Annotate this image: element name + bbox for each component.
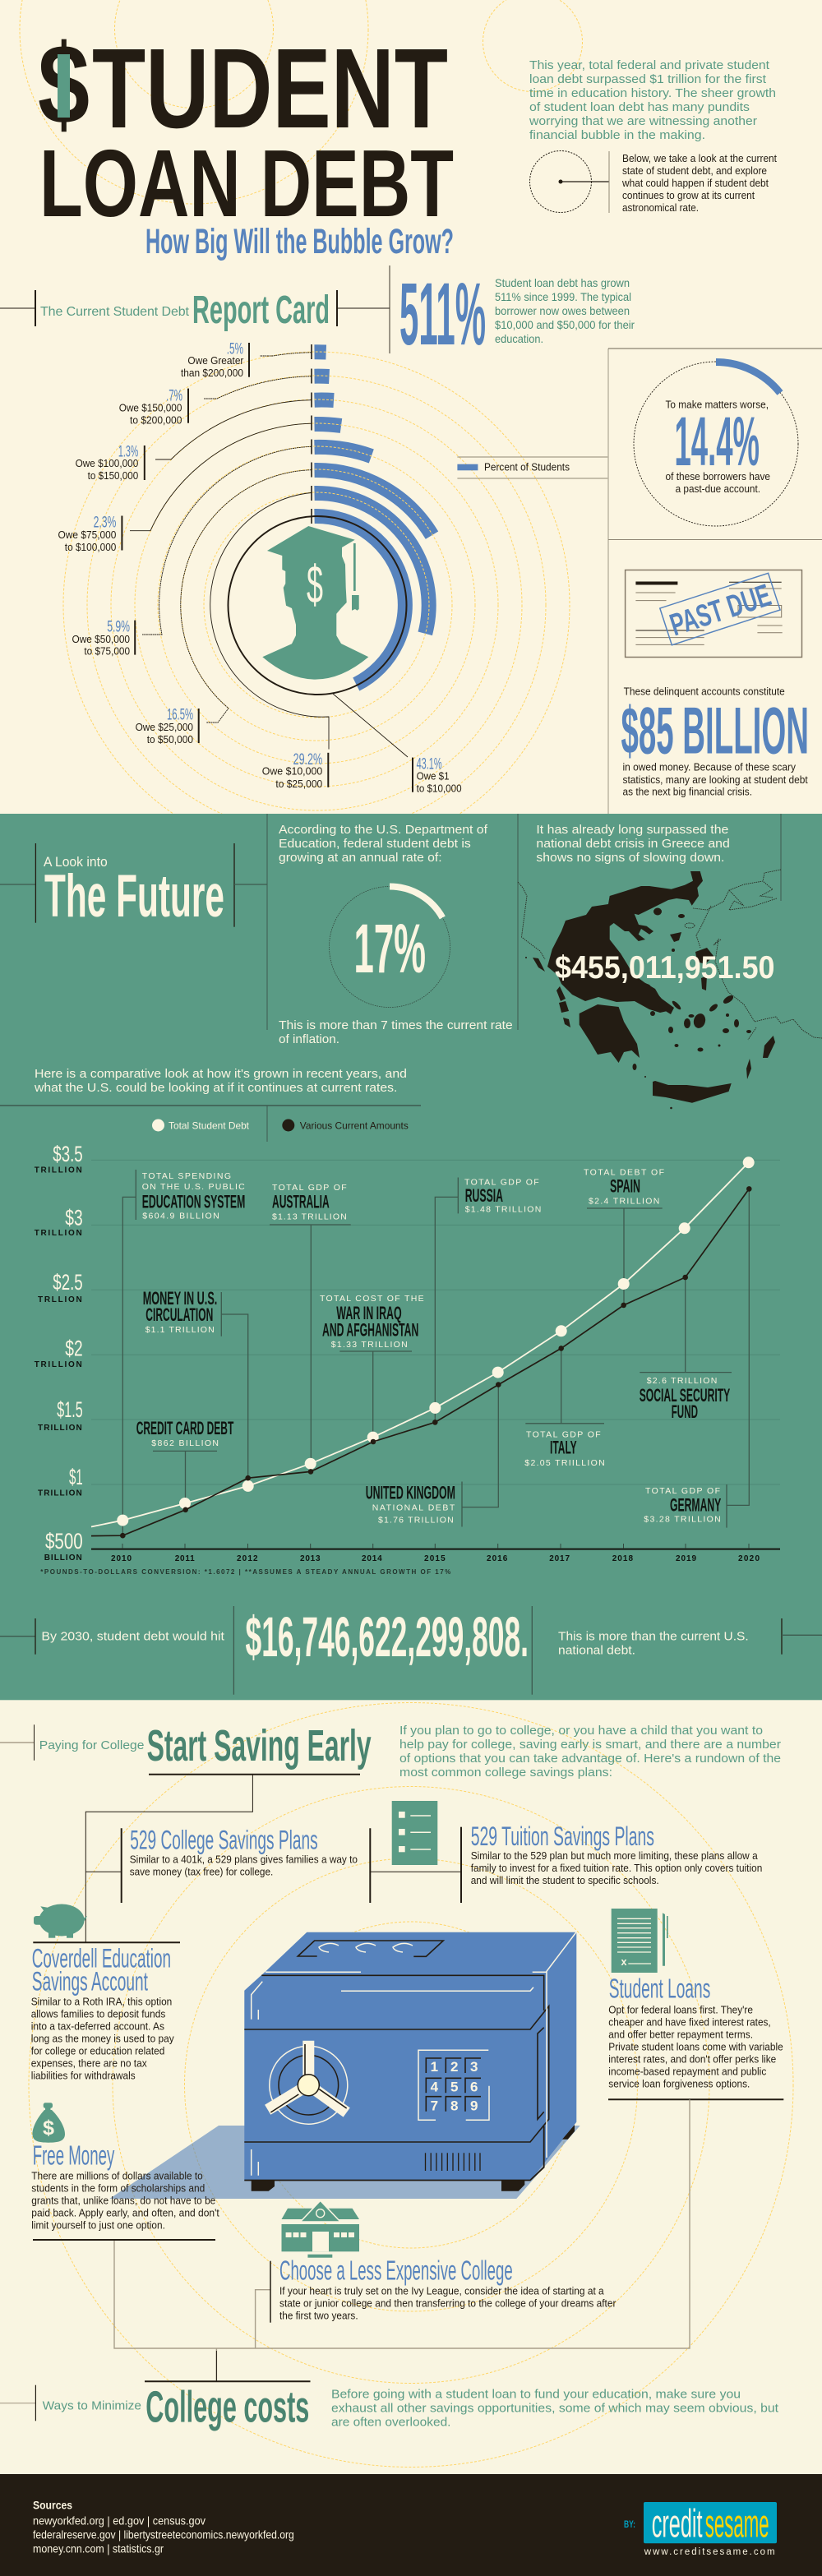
panel: 529 tuition savings plans: and will limit the student to specific schools. [471, 1874, 659, 1886]
dial wheel [268, 2041, 348, 2124]
intro note: astronomical rate. [622, 201, 699, 214]
y axis labels: $3 [65, 1206, 83, 1230]
annotation: australia [272, 1183, 347, 1222]
annotation: united kingdom [366, 1483, 455, 1526]
label: .7% [119, 387, 188, 426]
panel: choose a less expensive college: Choose a Less Expensive College [279, 2255, 513, 2285]
annotation: money in circulation: $1.1 TRILLION [145, 1325, 215, 1335]
y axis labels: $2.5 [53, 1270, 83, 1295]
y axis labels: $1.5 [57, 1397, 83, 1422]
label: 43.1%: 43.1% [417, 756, 442, 773]
heading: start saving early: Paying for College [39, 1738, 144, 1752]
annotation: education system: $604.9 BILLION [142, 1212, 219, 1221]
label: .7%: Owe $150,000 [119, 402, 182, 413]
percent bars [314, 352, 432, 684]
keypad: 6 [470, 2079, 478, 2094]
annotation: war cost: AND AFGHANISTAN [322, 1319, 418, 1340]
x axis labels: 2015 [424, 1554, 446, 1563]
panel: 529 college savings plans: 529 College Savings Plans [130, 1825, 318, 1854]
y axis labels: $500 [45, 1529, 83, 1553]
panel: free money: grants that, unlike loans, do not have to be [31, 2195, 215, 2207]
illustration: bank safe [109, 1932, 580, 2199]
annotation: education system: TOTAL SPENDING [142, 1171, 231, 1181]
intro text: of student loan debt has many pundits [529, 100, 750, 114]
text: greece comparison: It has already long surpassed the [536, 823, 728, 837]
panel: free money: There are millions of dollars available to [31, 2170, 203, 2182]
annotation: education system [142, 1171, 245, 1221]
y axis labels: TRILLION [35, 1229, 82, 1238]
stat: 17% dial: 17% [353, 910, 426, 987]
series: total student debt [91, 1156, 755, 1527]
panel: student loans: service loan forgiveness options. [608, 2077, 750, 2089]
title: dollar sign: $ [38, 21, 90, 148]
stat: $85 billion: These delinquent accounts constitute [624, 686, 785, 697]
legend: chart [152, 1119, 409, 1131]
y axis labels: $3.5 [53, 1142, 83, 1166]
annotation: social security fund [640, 1376, 730, 1422]
icon: past due bill [626, 570, 802, 658]
title: LOAN DEBT [39, 130, 454, 237]
connector lines [33, 1775, 783, 2381]
stat: greece debt: $455,011,951.50 [555, 950, 774, 986]
label: 43.1% [413, 756, 462, 795]
annotation: germany: TOTAL GDP OF [645, 1486, 720, 1496]
intro text: time in education history. The sheer growth [529, 86, 776, 100]
text: growth rate intro: Education, federal student debt is [279, 837, 471, 851]
intro note: Below, we take a look at the current [622, 152, 777, 164]
keypad: 3 [470, 2059, 478, 2075]
panel: 529 tuition savings plans [461, 1821, 762, 1903]
heading: the future: A Look into [44, 855, 108, 870]
label: 43.1%: Owe $1 [417, 771, 450, 782]
label: 1.3%: 1.3% [118, 444, 138, 460]
label: 16.5%: to $50,000 [147, 734, 193, 746]
intro text: financial bubble in the making. [529, 128, 705, 142]
annotation: credit card debt: CREDIT CARD DEBT [136, 1418, 234, 1438]
label: 1.3% [76, 444, 145, 482]
heading: report card: The Current Student Debt [40, 305, 190, 319]
x axis labels: 2016 [487, 1554, 508, 1563]
panel: coverdell education savings account [31, 1942, 180, 2081]
keypad: 7 [431, 2098, 438, 2114]
annotation: war cost: TOTAL COST OF THE [320, 1294, 424, 1304]
heading: report card [0, 265, 390, 353]
panel: 529 tuition savings plans: 529 Tuition Savings Plans [471, 1821, 654, 1851]
intro note: state of student debt, and explore [622, 164, 767, 177]
annotation: germany: GERMANY [670, 1495, 721, 1516]
crete [653, 1081, 732, 1103]
panel: coverdell education savings account: allows families to deposit funds [31, 2007, 166, 2020]
centre ring [229, 516, 406, 695]
islands [695, 948, 713, 964]
intro text [529, 58, 776, 142]
intro note [621, 152, 777, 214]
icon: piggy bank [34, 1904, 87, 1938]
label: 29.2%: to $25,000 [275, 778, 322, 790]
panel: free money: limit yourself to just one option. [31, 2219, 165, 2232]
icon: graduate head silhouette: $ [307, 554, 323, 615]
icon: money bag: $ [43, 2117, 54, 2140]
annotation: italy: TOTAL GDP OF [526, 1430, 601, 1440]
label: 5.9%: Owe $50,000 [72, 634, 130, 645]
panel: coverdell education savings account: Similar to a Roth IRA, this option [31, 1995, 172, 2007]
annotation: spain: SPAIN [610, 1176, 640, 1197]
y axis labels: $1 [69, 1465, 83, 1489]
text: chart intro: Here is a comparative look at how it's grown in recent years, and [35, 1067, 407, 1081]
logo: credit sesame [624, 2502, 777, 2557]
intro text: loan debt surpassed $1 trillion for the first [529, 72, 767, 86]
intro: college savings: of options that you can take advantage of. Here's a rundown of the [399, 1752, 781, 1766]
panel: 2030 projection: This is more than the current U.S. [558, 1630, 749, 1644]
panel: free money [31, 2140, 219, 2232]
panel: free money: paid back. Apply early, and often, and don't [31, 2207, 219, 2219]
stat: $85 billion: statistics, many are looking at student debt [623, 774, 808, 786]
panel: student loans: income-based repayment and public [608, 2065, 767, 2077]
legend: chart: Various Current Amounts [300, 1119, 409, 1131]
annotation: germany [644, 1486, 721, 1524]
annotation: united kingdom: NATIONAL DEBT [372, 1503, 455, 1512]
icon: money bag [32, 2103, 65, 2143]
text: growth rate intro [279, 823, 488, 865]
label: .5% [181, 340, 249, 379]
panel: choose a less expensive college: the first two years. [279, 2310, 358, 2322]
chart: debt growth line chart [35, 1142, 780, 1576]
safe body [244, 1932, 576, 2181]
stamp: past due [660, 573, 780, 645]
panel: 529 college savings plans: save money (tax free) for college. [130, 1866, 273, 1878]
panel: free money: Free Money [33, 2140, 115, 2170]
annotation: social security fund: SOCIAL SECURITY [640, 1385, 730, 1406]
label: 16.5%: Owe $25,000 [136, 722, 193, 733]
panel: coverdell education savings account: Coverdell Education [32, 1943, 171, 1973]
panel: student loans: Opt for federal loans first. They're [608, 2003, 753, 2015]
panel: 2030 projection [0, 1605, 822, 1695]
panel: free money: students in the form of scholarships and [31, 2182, 205, 2195]
label: 29.2%: Owe $10,000 [262, 766, 322, 778]
panel: student loans: cheaper and have fixed interest rates, [608, 2015, 771, 2028]
x axis labels: 2012 [237, 1554, 258, 1563]
annotation: money in circulation [143, 1288, 217, 1335]
intro: college savings: If you plan to go to college, or you have a child that you want to [399, 1724, 763, 1738]
heading: college costs [0, 2383, 309, 2432]
panel: coverdell education savings account: for college or education related [31, 2044, 164, 2057]
heading: college costs: College costs [145, 2383, 309, 2432]
intro: minimize costs: are often overlooked. [331, 2415, 450, 2429]
x axis labels: 2019 [676, 1554, 696, 1563]
intro: college savings: help pay for college, saving early is smart, and there are a number [399, 1738, 781, 1752]
peloponnese [580, 1004, 640, 1063]
stat: $85 billion: as the next big financial crisis. [623, 786, 752, 797]
title [38, 21, 454, 261]
heading: start saving early [0, 1721, 372, 1770]
panel: 2030 projection: national debt. [558, 1644, 635, 1658]
y axis labels: TRILLION [35, 1166, 82, 1175]
y axis labels: TRILLION [35, 1360, 82, 1369]
sources: federalreserve.gov | libertystreeteconomics.newyorkfed.org [33, 2528, 294, 2541]
y axis labels: TRLLION [38, 1295, 82, 1304]
label: 2.3% [58, 514, 122, 553]
icon: contract and pen [612, 1909, 668, 1973]
annotation: russia [464, 1177, 541, 1215]
stat: 511%: education. [495, 332, 543, 345]
heading: report card: Report Card [192, 289, 330, 332]
y axis labels: TRILLION [38, 1489, 82, 1498]
text: growth rate intro: growing at an annual rate of: [279, 851, 442, 865]
x axis labels [111, 1554, 760, 1563]
annotation: spain: $2.4 TRILLION [589, 1196, 659, 1206]
stat: 511%: 511% since 1999. The typical [495, 290, 631, 303]
icon: contract and pen: x [621, 1955, 627, 1968]
stat: 14.4% dial: a past-due account. [676, 483, 760, 495]
label: .7%: .7% [166, 387, 182, 404]
keypad [418, 2050, 489, 2120]
stat: 511%: Student loan debt has grown [495, 276, 630, 289]
y axis labels: $2 [65, 1336, 83, 1361]
annotation: credit card debt: $862 BILLION [151, 1438, 219, 1448]
panel: 2030 projection: $16,746,622,299,808. [245, 1605, 529, 1669]
panel: 529 tuition savings plans: Similar to the 529 plan but much more limiting, these plans allow a [471, 1849, 758, 1862]
panel: coverdell education savings account: into a tax-deferred account. As [31, 2020, 164, 2032]
text: inflation note: This is more than 7 times the current rate [279, 1018, 513, 1032]
text: inflation note [279, 1018, 513, 1046]
stamp: past due: PAST DUE [666, 578, 775, 643]
x axis labels: 2013 [300, 1554, 321, 1563]
text: greece comparison [536, 823, 730, 865]
panel: 2030 projection: By 2030, student debt would hit [41, 1630, 225, 1644]
sources [33, 2500, 294, 2555]
feet [252, 2125, 575, 2191]
stat: 511%: 511% [399, 264, 486, 363]
chart: radial bars of debt by amount owed [63, 344, 570, 858]
text: inflation note: of inflation. [279, 1032, 339, 1046]
text: chart intro: what the U.S. could be looking at if it continues at current rates. [34, 1081, 397, 1095]
panel: 529 tuition savings plans: family to invest for a fixed tuition rate. This option only covers tuition [471, 1862, 762, 1874]
panel: coverdell education savings account: expenses, there are no tax [31, 2057, 147, 2069]
panel: 529 college savings plans: Similar to a 401k, a 529 plans gives families a way to [130, 1854, 358, 1866]
annotation: australia: AUSTRALIA [272, 1191, 330, 1212]
annotation: credit card debt [136, 1418, 234, 1448]
intro note: what could happen if student debt [621, 177, 769, 189]
label: .5%: than $200,000 [181, 367, 243, 379]
annotation: education system: EDUCATION SYSTEM [142, 1191, 245, 1212]
annotation: italy: ITALY [550, 1438, 577, 1458]
bar ticks [311, 344, 312, 524]
keypad: 1 [431, 2059, 438, 2075]
logo: credit sesame: BY: [624, 2518, 635, 2530]
keypad: 4 [431, 2079, 439, 2094]
panel: choose a less expensive college: state or junior college and then transferring to the college of your dreams after [279, 2297, 616, 2310]
sources: newyorkfed.org | ed.gov | census.gov [33, 2514, 206, 2528]
sources: money.cnn.com | statistics.gr [33, 2542, 164, 2555]
annotation: italy: $2.05 TRIILLION [524, 1458, 605, 1468]
safe shadow [109, 2126, 580, 2199]
annotation: war cost [320, 1294, 424, 1350]
panel: choose a less expensive college [270, 2255, 616, 2323]
panel: the future (teal band) [0, 814, 822, 1700]
legend: percent of students: Percent of Students [484, 462, 570, 473]
label: .7%: to $200,000 [130, 414, 182, 426]
intro: minimize costs [331, 2387, 779, 2429]
label: 5.9% [72, 618, 135, 658]
legend: chart: Total Student Debt [169, 1119, 250, 1131]
annotation: social security fund: FUND [672, 1401, 698, 1422]
annotation: social security fund: $2.6 TRILLION [647, 1376, 717, 1386]
x axis labels: 2014 [362, 1554, 382, 1563]
panel: student loans: and offer better repayment terms. [608, 2028, 753, 2040]
keypad: 8 [450, 2098, 458, 2114]
stat: 511%: borrower now owes between [495, 304, 630, 317]
mainland [547, 871, 703, 1013]
label: .5%: .5% [227, 340, 243, 358]
keypad: 5 [450, 2079, 458, 2094]
intro: minimize costs: Before going with a student loan to fund your education, make sure you [331, 2387, 741, 2401]
label: 1.3%: Owe $100,000 [76, 458, 138, 469]
leader arcs [130, 353, 408, 757]
label: 16.5% [136, 706, 199, 746]
x axis labels: 2017 [549, 1554, 570, 1563]
x axis labels: 2020 [738, 1554, 760, 1563]
intro: minimize costs: exhaust all other savings opportunities, some of which may seem obvious, but [331, 2401, 779, 2415]
y axis labels [35, 1142, 83, 1563]
icon: checklist [392, 1801, 437, 1865]
safe highlights [252, 1932, 576, 2176]
panel: choose a less expensive college: If your heart is truly set on the Ivy League, consider the idea of starting at a [279, 2285, 604, 2297]
evia [637, 980, 674, 1014]
label: 1.3%: to $150,000 [88, 470, 138, 482]
stat: 14.4% dial: of these borrowers have [666, 471, 770, 482]
heading: the future [0, 843, 267, 930]
y axis labels: BILLION [44, 1553, 82, 1563]
text: greece comparison: shows no signs of slowing down. [536, 851, 724, 865]
annotation: united kingdom: UNITED KINGDOM [366, 1483, 455, 1503]
panel: coverdell education savings account: liabilities for withdrawals [31, 2069, 136, 2081]
x axis labels: 2011 [175, 1554, 195, 1563]
annotation: australia: TOTAL GDP OF [272, 1183, 347, 1193]
label: 16.5%: 16.5% [167, 706, 193, 723]
text: growth rate intro: According to the U.S. Department of [279, 823, 488, 837]
label: 5.9%: 5.9% [107, 618, 130, 635]
intro: college savings [399, 1724, 781, 1780]
stat: $85 billion [621, 686, 809, 797]
footer [0, 2474, 822, 2576]
label: 2.3%: Owe $75,000 [58, 529, 116, 541]
title: How Big Will the Bubble Grow? [145, 222, 454, 261]
heading: start saving early: Start Saving Early [147, 1721, 372, 1770]
intro note: continues to grow at its current [622, 189, 755, 201]
x axis labels: 2018 [612, 1554, 633, 1563]
keypad: 2 [450, 2059, 458, 2075]
text: chart intro [34, 1067, 407, 1095]
footnote: *POUNDS-TO-DOLLARS CONVERSION: *1.6072 | **ASSUMES A STEADY ANNUAL GROWTH OF 17% [40, 1568, 450, 1576]
annotation: spain: TOTAL DEBT OF [584, 1167, 664, 1177]
label: 43.1%: to $10,000 [417, 783, 462, 795]
sources: Sources [33, 2500, 72, 2512]
intro text: This year, total federal and private student [529, 58, 770, 72]
panel: student loans: interest rates, and don't offer perks like [608, 2052, 776, 2065]
label: 2.3%: to $100,000 [65, 542, 116, 553]
intro text: worrying that we are witnessing another [529, 114, 757, 128]
series: various current amounts [91, 1186, 752, 1538]
annotation: education system: ON THE U.S. PUBLIC [142, 1182, 245, 1192]
annotation: russia: $1.48 TRILLION [465, 1205, 541, 1215]
label: 2.3%: 2.3% [94, 514, 116, 531]
panel: student loans: Student Loans [609, 1974, 710, 2004]
safe outlines [244, 1941, 549, 2180]
label: .5%: Owe Greater [187, 355, 243, 367]
annotation: spain [584, 1167, 664, 1206]
annotation: war cost: WAR IN IRAQ [336, 1303, 402, 1323]
logo: credit sesame: credit [652, 2503, 703, 2546]
vents [426, 2153, 480, 2171]
icon: college building [281, 2200, 359, 2258]
label: 29.2% [262, 751, 328, 790]
icon: graduate head silhouette [262, 526, 368, 680]
logo: credit sesame: www.creditsesame.com [644, 2547, 775, 2557]
title: TUDENT [92, 25, 448, 152]
annotation: russia: RUSSIA [465, 1185, 503, 1206]
label: 29.2%: 29.2% [293, 751, 322, 769]
annotation: money in circulation: CIRCULATION [145, 1304, 213, 1325]
stat: 14.4% dial [634, 362, 798, 526]
heading: college costs: Ways to Minimize [43, 2399, 141, 2413]
x axis labels: 2010 [111, 1554, 132, 1563]
annotation leader lines [122, 1170, 749, 1535]
icon: dashed orbit circle with dot [529, 151, 609, 213]
intro: college savings: most common college savings plans: [399, 1766, 612, 1780]
text: greece comparison: national debt crisis in Greece and [536, 837, 730, 851]
map: greece [518, 870, 822, 1109]
annotation: united kingdom: $1.76 TRILLION [378, 1516, 454, 1526]
keypad: 9 [470, 2098, 478, 2114]
panel: coverdell education savings account: long as the money is used to pay [31, 2032, 174, 2044]
annotation: russia: TOTAL GDP OF [464, 1177, 539, 1187]
annotation: war cost: $1.33 TRILLION [331, 1340, 408, 1350]
annotation: money in circulation: MONEY IN U.S. [143, 1288, 217, 1309]
panel: past due sidebar [608, 349, 822, 814]
stat: 511%: $10,000 and $50,000 for their [495, 318, 635, 331]
stat: 17% dial [329, 886, 450, 1008]
annotation: germany: $3.28 TRILLION [644, 1514, 721, 1524]
annotation: australia: $1.13 TRILLION [272, 1212, 347, 1222]
panel: student loans [608, 1974, 783, 2089]
stat: $85 billion: in owed money. Because of these scary [623, 762, 797, 773]
panel: 529 college savings plans [122, 1825, 370, 1903]
panel: student loans: Private student loans come with variable [608, 2040, 783, 2052]
stat: 14.4% dial: To make matters worse, [666, 399, 769, 411]
y axis labels: TRILLION [38, 1424, 82, 1433]
annotation: italy [524, 1430, 605, 1468]
panel: coverdell education savings account: Savings Account [32, 1967, 148, 1997]
heading: the future: The Future [44, 863, 224, 930]
label: 5.9%: to $75,000 [84, 646, 130, 658]
legend: percent of students [457, 457, 608, 478]
